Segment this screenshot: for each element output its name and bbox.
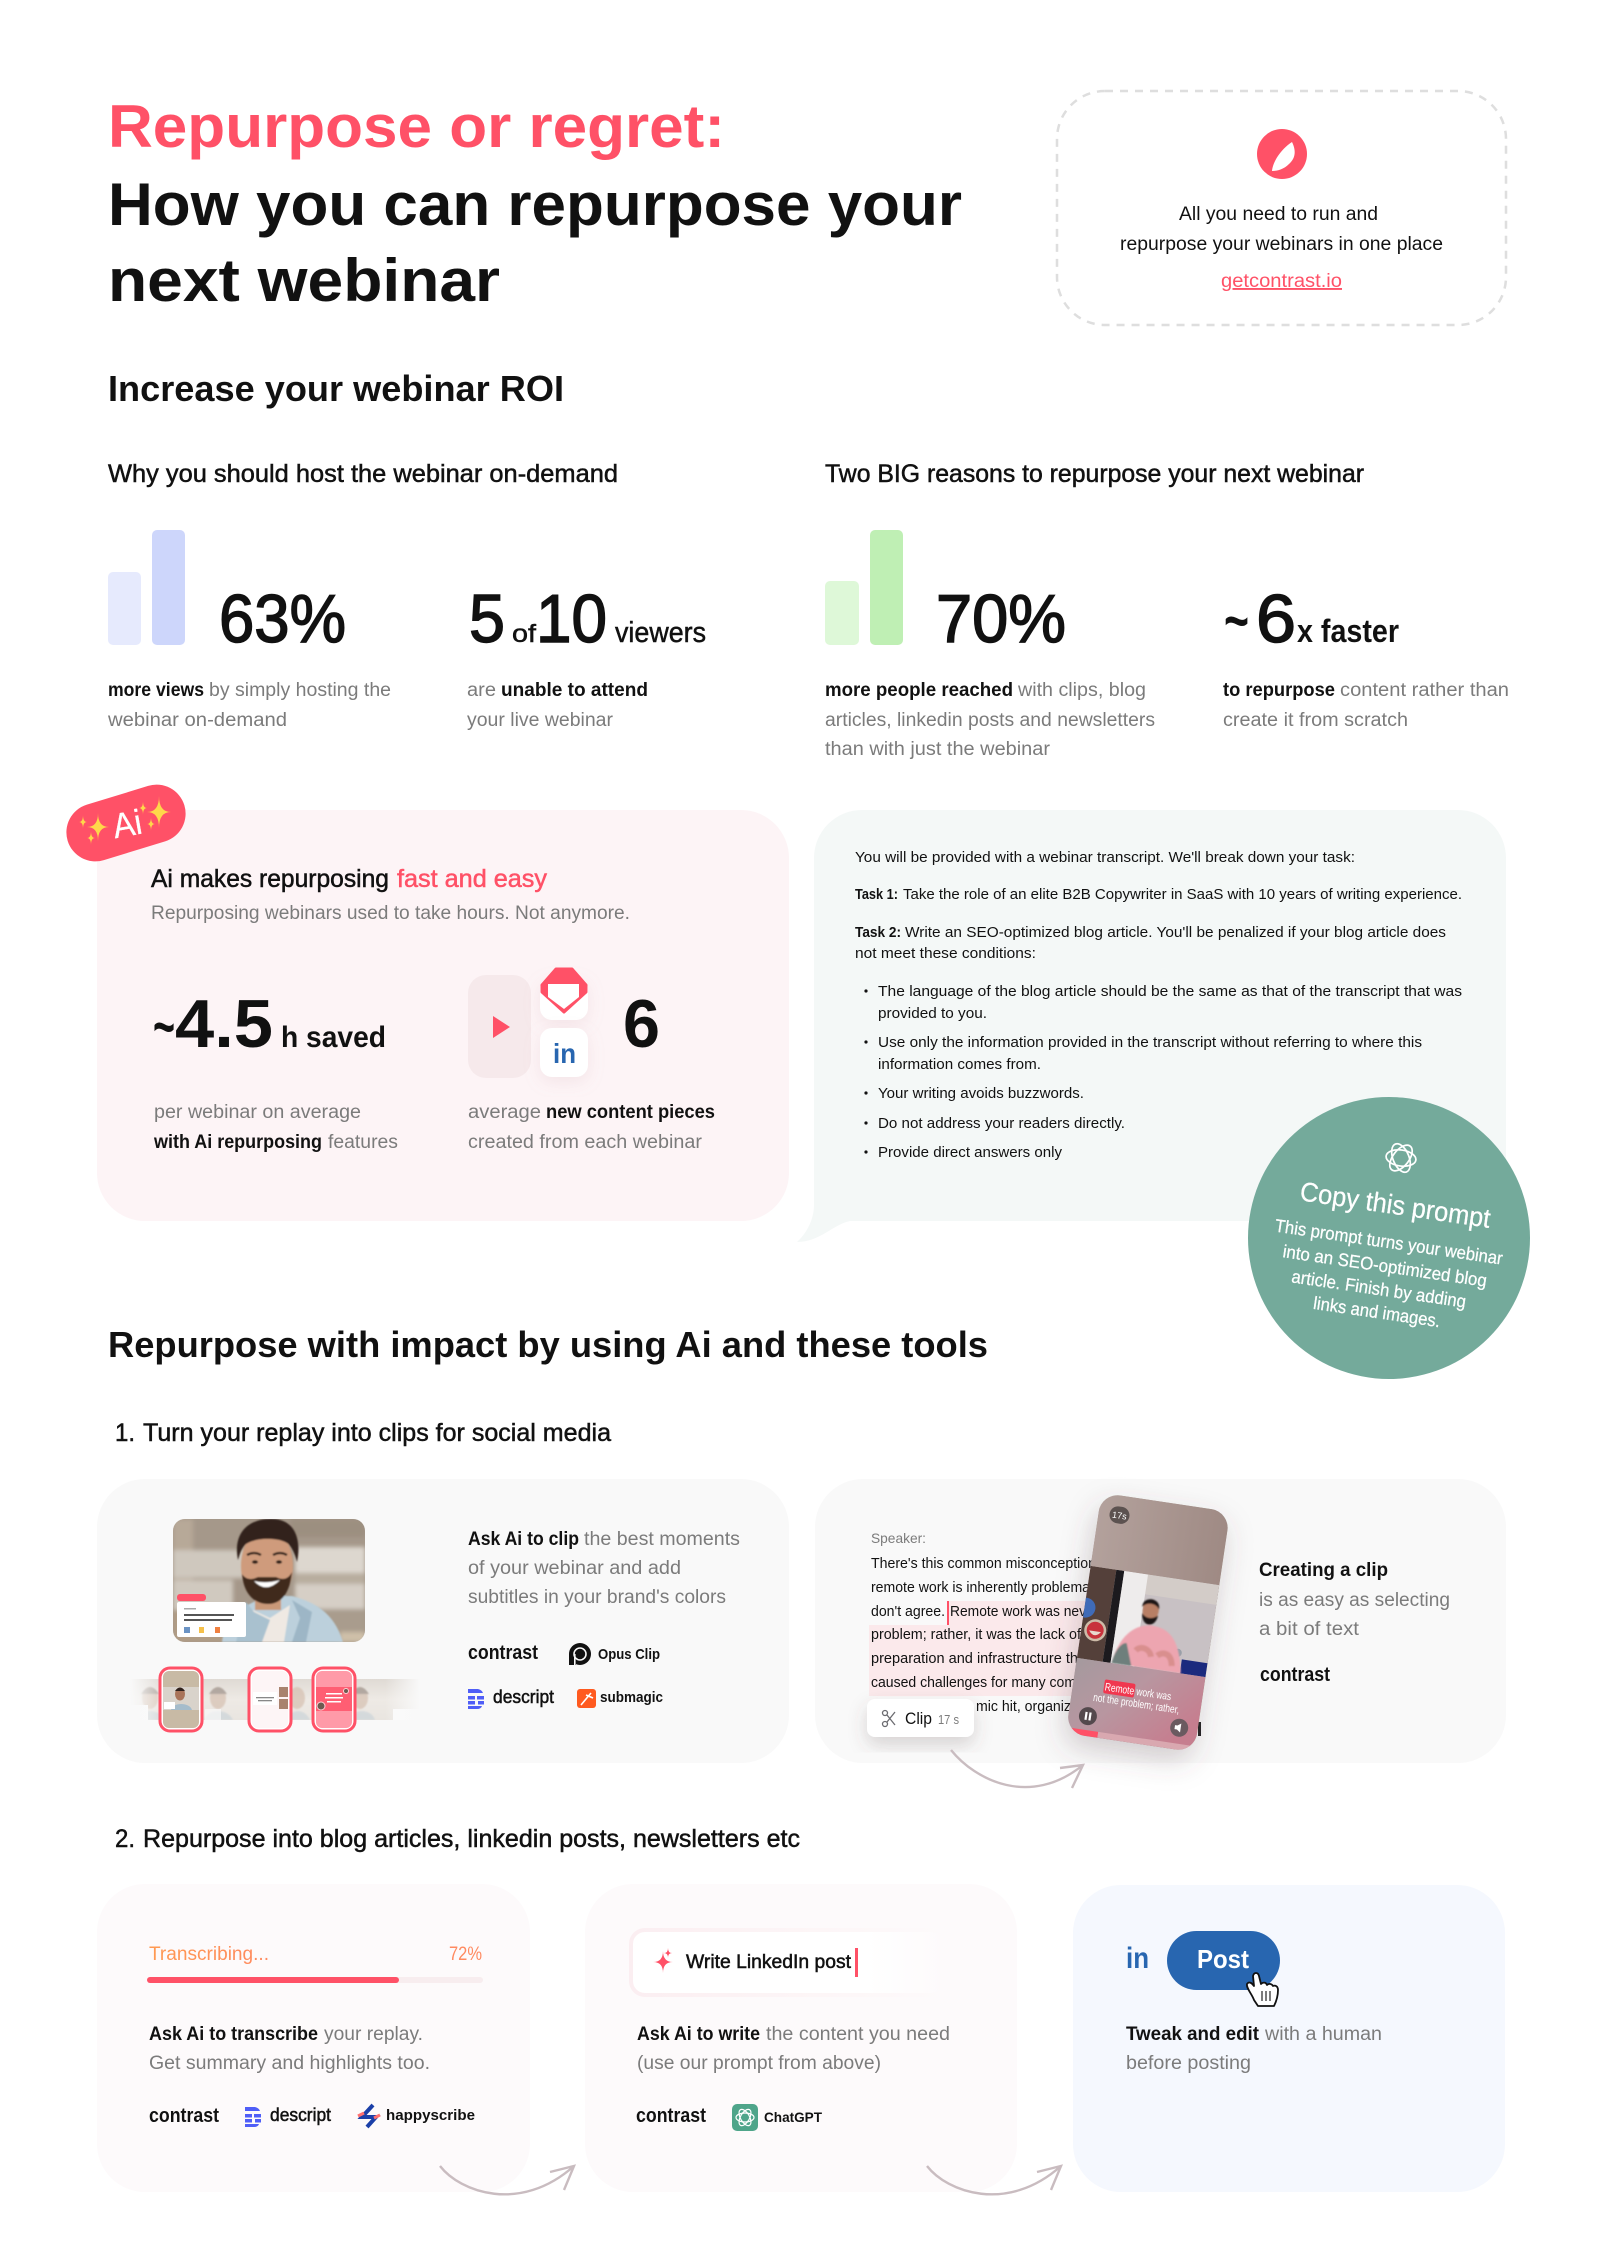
progress bar: Transcribing...: [149, 1944, 269, 1965]
text: tweak and edit: Tweak and edit: [1126, 2024, 1260, 2045]
icon: video play tile: [468, 975, 531, 1078]
text: ask Ai to clip: the best moments: [584, 1529, 740, 1550]
logo: contrast: contrast: [636, 2105, 706, 2127]
panel: Ai makes repurposing fast: Repurposing webinars used to take hours. Not anymore.: [151, 903, 630, 924]
bar chart: green bars: [825, 530, 903, 645]
prompt text: Use only the information provided in the transcript without referring to where this: [878, 1035, 1422, 1051]
stat: 5 of 10 viewers: are: [467, 680, 496, 701]
panel: transcribe: [97, 1884, 530, 2192]
panel: write: [585, 1884, 1017, 2192]
transcript text: problem; rather, it was the lack of: [871, 1626, 1082, 1643]
clip frame two: [249, 1668, 291, 1731]
step heading 1: 1.: [115, 1419, 135, 1447]
prompt text: not meet these conditions:: [855, 946, 1036, 962]
panel: ask Ai to clip: [132, 1519, 740, 1732]
transcript text: Remote work was nev: [950, 1603, 1086, 1620]
button: post: [1167, 1931, 1280, 1990]
stat: 6x faster: to repurpose: [1223, 680, 1335, 701]
prompt text: Task 1:: [855, 887, 898, 903]
stat: 4.5h saved: [153, 986, 398, 1153]
panel: transcribe: Get summary and highlights too.: [149, 2053, 430, 2074]
small trending card: [177, 1594, 246, 1637]
prompt text: You will be provided with a webinar transcript. We'll break down your task:: [855, 850, 1355, 866]
logo: descript: [468, 1687, 554, 1709]
logo: happyscribe: [358, 2105, 475, 2127]
card: clip button: 17 s: [938, 1712, 959, 1727]
arrow: transcribe to write: [440, 2166, 574, 2194]
prompt text: provided to you.: [878, 1006, 987, 1022]
phone controls: [1078, 1505, 1219, 1740]
stat: 63% more views: more views: [108, 680, 204, 701]
panel: Ai makes repurposing fast: [59, 777, 789, 1221]
stat: 63% more views: by simply hosting the: [209, 680, 391, 701]
step heading 1: Turn your replay into clips for social media: [143, 1419, 611, 1447]
stat: 63% more views: [107, 530, 391, 731]
icon: blog gem tile: [540, 969, 588, 1020]
panel: write: Ask Ai to write: [637, 2024, 760, 2045]
callout: copy this prompt circle: Copy this prompt: [1298, 1176, 1493, 1234]
clip frame three: [313, 1668, 355, 1731]
stat: 5 of 10 viewers: of: [512, 620, 536, 648]
logo: submagic: submagic: [600, 1689, 663, 1706]
prompt text: Task 2:: [855, 925, 901, 941]
text: tweak and edit: [1126, 2024, 1382, 2074]
callout: contrast promo: repurpose your webinars in one place: [1120, 234, 1443, 255]
phone caption: not the problem; rather,: [1092, 1692, 1180, 1717]
text: creating a clip: a bit of text: [1259, 1619, 1360, 1640]
text: tweak and edit: before posting: [1126, 2053, 1251, 2074]
prompt text: [855, 850, 1462, 1161]
stat: 6x faster: create it from scratch: [1223, 710, 1408, 731]
transcript text: remote work is inherently problema: [871, 1579, 1091, 1596]
clip frame one: [160, 1668, 202, 1731]
progress bar: 72%: [449, 1944, 482, 1965]
callout: copy this prompt circle: links and images.: [1312, 1293, 1442, 1331]
callout: copy this prompt circle: This prompt turns your webinar: [1274, 1216, 1504, 1269]
logo: opus clip: Opus Clip: [598, 1646, 660, 1663]
icon: hand cursor: [1247, 1973, 1278, 2006]
stat: 5 of 10 viewers: 10: [536, 581, 607, 657]
logo: chatgpt: [732, 2104, 822, 2131]
stat: 5 of 10 viewers: your live webinar: [467, 710, 614, 731]
icon: linkedin tile: in: [553, 1038, 576, 1069]
transcript text: preparation and infrastructure th: [871, 1650, 1078, 1667]
logo: happyscribe: happyscribe: [386, 2107, 475, 2124]
stat: 4.5h saved: h saved: [281, 1021, 386, 1054]
panel: tweak and post: [1073, 1885, 1505, 2192]
title: [108, 93, 962, 314]
callout: contrast promo: getcontrast.io: [1221, 271, 1342, 292]
text: creating a clip: Creating a clip: [1259, 1560, 1388, 1581]
step heading 2: Repurpose into blog articles, linkedin posts, newsletters etc: [143, 1825, 800, 1853]
stat: 6 new content pieces: average: [468, 1102, 541, 1123]
stat: 5 of 10 viewers: [467, 581, 706, 731]
logo: submagic: [577, 1689, 663, 1708]
transcript text: caused challenges for many com: [871, 1674, 1076, 1691]
stat: 5 of 10 viewers: unable to attend: [501, 680, 648, 701]
heading: increase ROI: Increase your webinar ROI: [108, 368, 564, 409]
icon: scissors: [882, 1710, 895, 1726]
subheading: two reasons: Two BIG reasons to repurpose your next webinar: [825, 460, 1364, 488]
stat: 6x faster: ~: [1224, 587, 1249, 654]
logo: contrast: contrast: [1260, 1664, 1330, 1686]
stat: 70% more people reached: articles, linkedin posts and newsletters: [825, 710, 1155, 731]
stat: 4.5h saved: per webinar on average: [154, 1102, 361, 1123]
arrow: write to post: [927, 2166, 1061, 2194]
stat: 6x faster: x faster: [1297, 613, 1399, 649]
transcript text: mic hit, organiz: [976, 1698, 1071, 1715]
stat: 6 new content pieces: new content pieces: [546, 1102, 715, 1123]
phone: vertical clip preview: [1057, 1491, 1230, 1752]
stat: 70% more people reached: more people reached: [825, 680, 1013, 701]
logo: chatgpt: ChatGPT: [764, 2109, 822, 2125]
stat: 70% more people reached: 70%: [936, 581, 1066, 657]
stat: 70% more people reached: than with just the webinar: [825, 739, 1051, 760]
prompt text: Write an SEO-optimized blog article. You'll be penalized if your blog article does: [905, 925, 1446, 941]
stat: 70% more people reached: with clips, blog: [1017, 680, 1146, 701]
title: Repurpose or regret:: [108, 93, 725, 160]
panel: transcribe: Ask Ai to transcribe: [149, 2024, 318, 2045]
step heading 2: 2.: [115, 1825, 135, 1853]
transcript text: Speaker:: [871, 1530, 926, 1546]
panel: Ai makes repurposing fast: fast and easy: [397, 865, 547, 893]
image: webinar speaker photo: [173, 1519, 365, 1642]
callout: copy this prompt circle: into an SEO-optimized blog: [1282, 1241, 1488, 1291]
logo: descript: descript: [493, 1687, 554, 1707]
card: clip button: Clip: [905, 1709, 932, 1728]
panel: write: the content you need: [766, 2024, 950, 2045]
stat: 5 of 10 viewers: 5: [469, 581, 505, 657]
stat: 4.5h saved: features: [328, 1132, 398, 1153]
prompt text: Your writing avoids buzzwords.: [878, 1086, 1084, 1102]
callout: contrast promo: [1057, 91, 1506, 325]
prompt text: Take the role of an elite B2B Copywriter in SaaS with 10 years of writing experience.: [903, 887, 1462, 903]
panel: creating a clip: [852, 1485, 1449, 1771]
subheading: on-demand: Why you should host the webinar on-demand: [108, 460, 618, 488]
video frame: [1068, 1565, 1219, 1677]
stat: 6 new content pieces: created from each webinar: [468, 1132, 703, 1153]
card: clip button: [867, 1699, 974, 1737]
transcript text: don't agree.: [871, 1603, 945, 1620]
bar chart: blue bars: [108, 530, 185, 645]
text: ask Ai to clip: subtitles in your brand's colors: [468, 1587, 726, 1608]
logo: opus clip: [569, 1643, 660, 1665]
icon: contrast logo: [1257, 129, 1307, 179]
progress bar: [147, 1944, 483, 1983]
panel: Ai makes repurposing fast: Ai makes repurposing: [151, 865, 389, 893]
stat: 6x faster: content rather than: [1340, 680, 1509, 701]
icon: linkedin tile: [540, 1028, 588, 1077]
stat: 5 of 10 viewers: viewers: [615, 617, 706, 649]
callout: copy this prompt circle: article. Finish by adding: [1290, 1266, 1467, 1312]
phone caption: Remote work was: [1104, 1681, 1172, 1703]
input box: write linkedin post: [631, 1930, 945, 1995]
title: next webinar: [108, 247, 500, 314]
stat: 6 new content pieces: 6: [623, 986, 660, 1062]
arrow: clip to phone: [951, 1750, 1083, 1788]
stat: 70% more people reached: [825, 530, 1155, 760]
panel: prompt speech bubble: [797, 810, 1506, 1242]
badge: Ai: [59, 777, 193, 869]
text: ask Ai to clip: of your webinar and add: [468, 1558, 681, 1579]
transcript text: There's this common misconception: [871, 1555, 1096, 1572]
callout: contrast promo: All you need to run and: [1179, 204, 1378, 225]
panel: write: (use our prompt from above): [637, 2053, 881, 2074]
phone controls: 17s: [1111, 1510, 1128, 1522]
logo: descript: [245, 2105, 331, 2127]
image: clips filmstrip: [130, 1668, 420, 1731]
logo: descript: descript: [270, 2105, 331, 2125]
stat: 6x faster: [1223, 581, 1509, 731]
transcript text: [869, 1530, 1201, 1736]
text: ask Ai to clip: Ask Ai to clip: [468, 1529, 579, 1550]
stat: 6 new content pieces: [468, 969, 715, 1153]
panel: transcribe: your replay.: [324, 2024, 423, 2045]
heading: repurpose with impact: Repurpose with impact by using Ai and these tools: [108, 1324, 988, 1365]
callout: copy this prompt circle: [1248, 1097, 1530, 1379]
phone caption: [1092, 1678, 1182, 1717]
input box: write linkedin post: Write LinkedIn post: [686, 1952, 852, 1973]
button: post: Post: [1197, 1944, 1249, 1974]
text: creating a clip: is as easy as selecting: [1259, 1590, 1450, 1611]
stat: 6x faster: 6: [1256, 581, 1296, 657]
icon: chatgpt knot: [1384, 1139, 1418, 1177]
prompt text: information comes from.: [878, 1057, 1041, 1073]
logo: contrast: contrast: [468, 1642, 538, 1664]
text: creating a clip: [1259, 1560, 1450, 1640]
stat: 4.5h saved: 4.5: [175, 986, 273, 1062]
prompt text: Provide direct answers only: [878, 1145, 1063, 1161]
stat: 4.5h saved: ~: [153, 993, 175, 1060]
badge: Ai: Ai: [110, 803, 145, 846]
stat: 4.5h saved: with Ai repurposing: [153, 1132, 322, 1153]
title: How you can repurpose your: [108, 171, 962, 238]
prompt text: Do not address your readers directly.: [878, 1116, 1125, 1132]
text: tweak and edit: with a human: [1264, 2024, 1382, 2045]
prompt text: The language of the blog article should be the same as that of the transcript that was: [878, 984, 1462, 1000]
stat: 63% more views: webinar on-demand: [107, 710, 287, 731]
icon: linkedin: in: [1126, 1942, 1149, 1975]
logo: contrast: contrast: [149, 2105, 219, 2127]
stat: 63% more views: 63%: [219, 581, 346, 657]
text: ask Ai to clip: [468, 1529, 740, 1608]
